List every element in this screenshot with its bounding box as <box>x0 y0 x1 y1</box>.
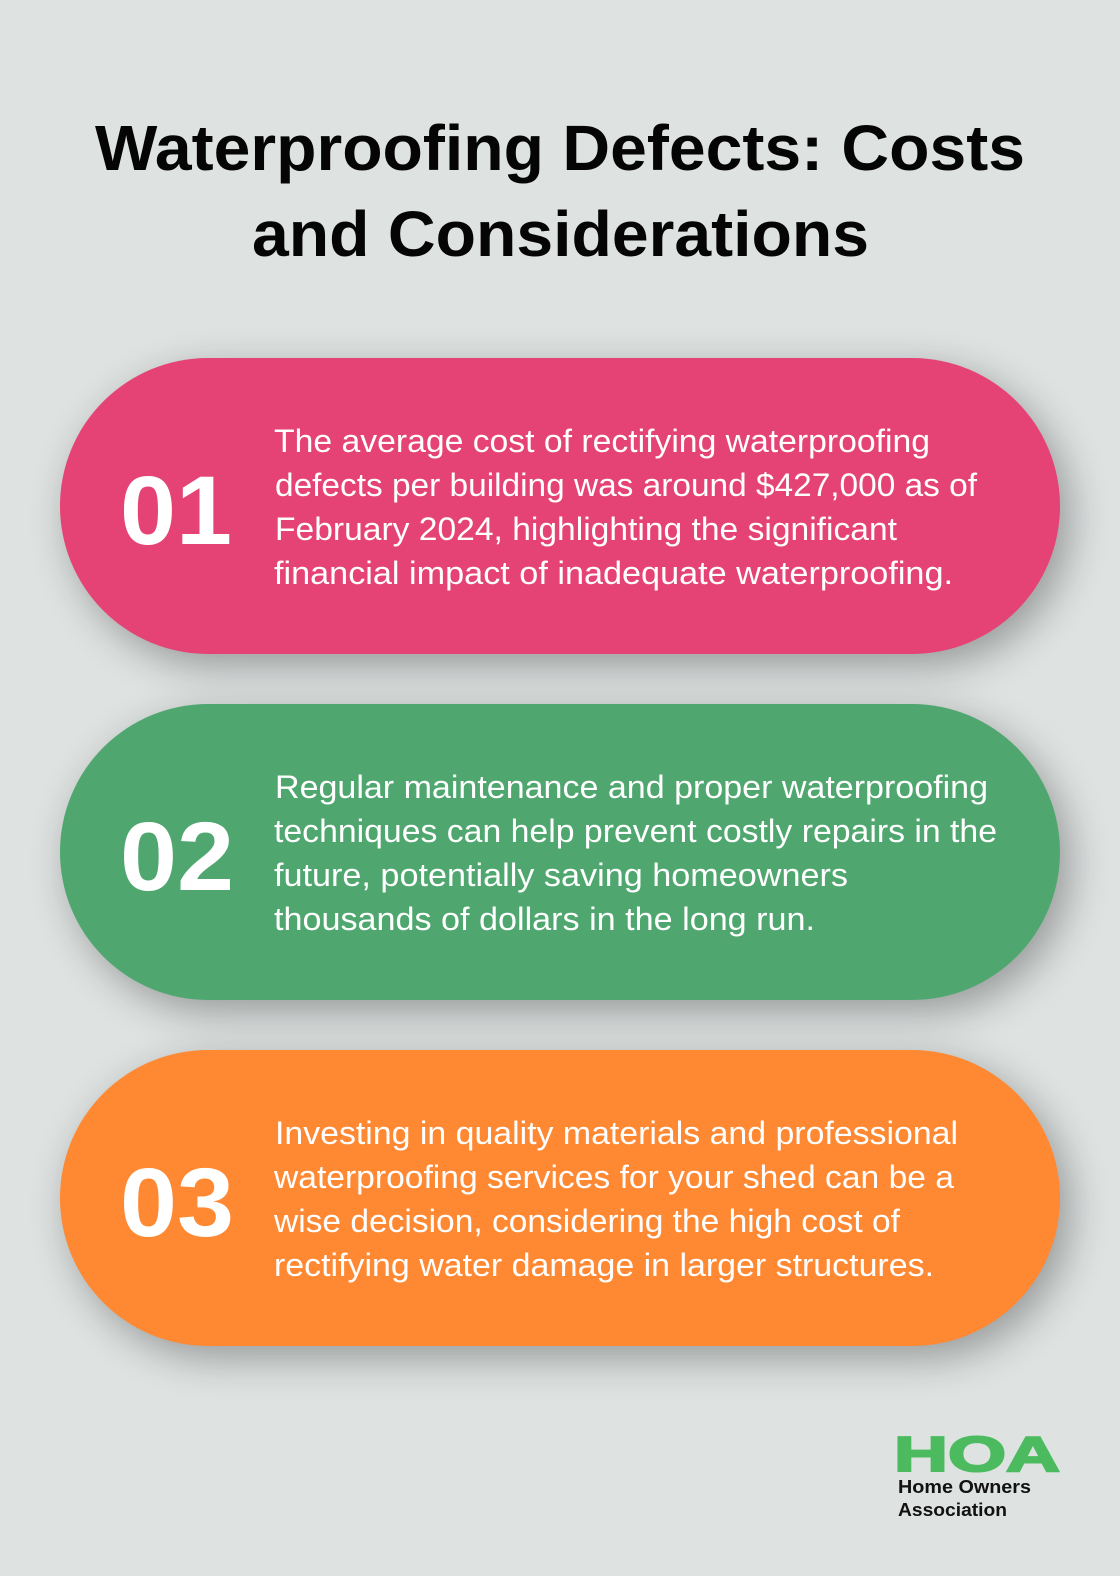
logo: HOA Home Owners Association: Home Owners <box>898 1476 1031 1497</box>
title: Waterproofing Defects: Costs <box>95 112 1025 184</box>
text block: maintenance: thousands of dollars in the long run. <box>274 901 815 937</box>
logo: HOA Home Owners Association: HOA <box>894 1428 1060 1482</box>
text block: average cost: The average cost of rectifying waterproofing <box>274 423 930 459</box>
logo: HOA Home Owners Association: Association <box>898 1499 1007 1520</box>
text block: maintenance <box>274 769 997 937</box>
title: and Considerations <box>252 198 869 270</box>
text block: average cost <box>274 423 978 591</box>
number 02: 02 <box>120 802 234 911</box>
text block: investing: waterproofing services for your shed can be a <box>273 1159 955 1195</box>
text block: investing: Investing in quality materials and professional <box>275 1115 958 1151</box>
panel: investing in quality <box>60 1050 1060 1346</box>
title <box>95 112 1025 270</box>
text block: maintenance: future, potentially saving homeowners <box>274 857 848 893</box>
number 03: 03 <box>120 1148 234 1257</box>
panel: regular maintenance <box>60 704 1060 1000</box>
text block: investing: wise decision, considering the high cost of <box>273 1203 901 1239</box>
text block: average cost: defects per building was around $427,000 as of <box>275 467 978 503</box>
text block: investing: rectifying water damage in larger structures. <box>274 1247 934 1283</box>
panel: average cost of defects <box>60 358 1060 654</box>
text block: maintenance: Regular maintenance and proper waterproofing <box>275 769 988 805</box>
text block: average cost: February 2024, highlighting the significant <box>275 511 897 547</box>
text block: investing <box>273 1115 958 1283</box>
text block: average cost: financial impact of inadequate waterproofing. <box>274 555 953 591</box>
logo: HOA Home Owners Association <box>894 1428 1060 1520</box>
number 01: 01 <box>120 456 232 565</box>
text block: maintenance: techniques can help prevent costly repairs in the <box>274 813 997 849</box>
